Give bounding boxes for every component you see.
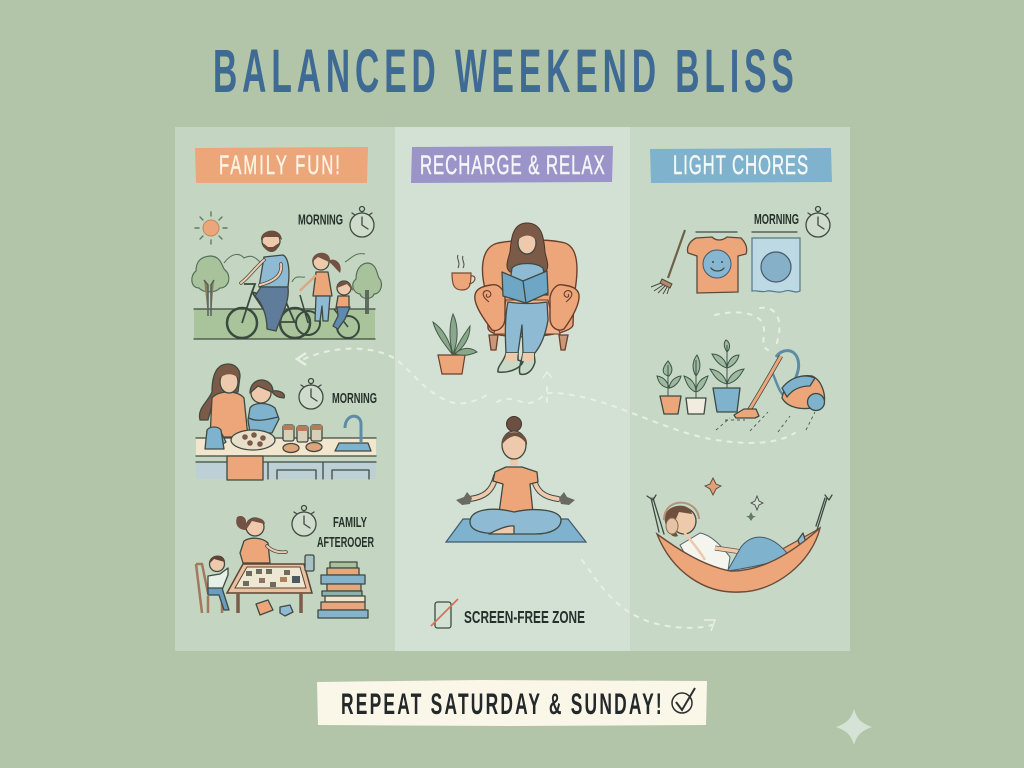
icon: stopwatch — [806, 206, 830, 237]
arrow: dashed path to family fun — [297, 349, 487, 403]
icon: broom rake — [651, 230, 685, 294]
tray of cookies — [231, 430, 275, 450]
counter — [196, 438, 376, 456]
panel: recharge and relax — [395, 127, 630, 651]
small lantern — [305, 555, 314, 571]
clothes lines — [696, 231, 797, 233]
heading: light chores: LIGHT CHORES — [673, 150, 808, 180]
bushes — [224, 254, 365, 282]
title: BALANCED WEEKEND BLISS — [213, 37, 794, 106]
figure: girl — [300, 253, 341, 321]
callout: repeat saturday and sunday: REPEAT SATURDAY & SUNDAY! — [341, 688, 662, 721]
arrow: dashed path to hammock — [582, 560, 715, 631]
label: family afternoon: FAMILY — [333, 515, 367, 531]
puzzle table — [227, 564, 312, 613]
jars — [283, 425, 322, 452]
vacuum cleaner — [716, 351, 824, 432]
scene: kitchen baking — [196, 364, 377, 480]
icon: check mark — [672, 688, 695, 713]
figure: child — [333, 281, 353, 329]
heading: family fun — [195, 147, 368, 183]
icon: crossed-out phone — [431, 599, 458, 628]
icon: stopwatch — [350, 206, 374, 237]
scene: laundry — [651, 206, 830, 294]
potted plants — [657, 340, 744, 414]
panel: family fun — [175, 127, 395, 651]
hammock back rim — [775, 528, 820, 562]
puzzle boxes on floor — [256, 600, 293, 616]
ropes — [647, 495, 832, 534]
towel — [227, 456, 263, 480]
person — [664, 503, 807, 571]
heading: recharge and relax: RECHARGE & RELAX — [420, 150, 605, 180]
label: morning: MORNING — [332, 391, 377, 407]
arrow: dashed path to light chores — [497, 308, 795, 443]
figure: woman — [236, 516, 286, 563]
heading: light chores — [650, 148, 832, 183]
callout: repeat saturday and sunday — [317, 680, 707, 726]
cabinets — [196, 462, 376, 479]
label: family afternoon — [317, 515, 374, 551]
hanging towel with circle — [752, 238, 800, 292]
icon: stopwatch — [292, 506, 316, 536]
scene: reading in armchair — [433, 223, 579, 374]
icon: potted plant — [433, 314, 477, 374]
sparkles — [705, 478, 763, 521]
scene: family bike ride — [192, 206, 381, 339]
armchair — [475, 240, 579, 350]
bicycle: girl — [296, 295, 320, 335]
icon: sparkle — [836, 709, 872, 745]
label: morning: MORNING — [298, 212, 343, 228]
scene: hammock — [647, 478, 832, 592]
label: morning: MORNING — [754, 212, 799, 228]
sink — [335, 416, 371, 451]
tree: left — [192, 256, 229, 316]
bicycle: child — [334, 309, 359, 338]
stack of books — [318, 562, 368, 618]
icon: coffee cup — [452, 255, 475, 290]
hammock body — [657, 528, 820, 592]
tree: right — [353, 263, 381, 314]
figure: yoga pose — [446, 416, 586, 542]
label: SCREEN-FREE ZONE — [464, 607, 585, 627]
kettle — [205, 427, 226, 449]
icon: sun — [195, 212, 227, 244]
body — [456, 416, 575, 534]
scene: family puzzle afternoon — [196, 506, 374, 618]
ground — [194, 309, 375, 339]
icon: stopwatch — [299, 378, 323, 409]
yoga mat — [446, 519, 586, 542]
panel: light chores — [630, 127, 850, 651]
screen-free zone note — [431, 599, 585, 628]
bicycle: dad — [227, 284, 310, 338]
heading: family fun: FAMILY FUN! — [219, 150, 340, 180]
figure: boy on chair — [196, 555, 229, 613]
t-shirt — [687, 237, 747, 293]
figure: mother — [199, 364, 248, 437]
scene: plants and vacuum — [657, 340, 824, 432]
figure: daughter — [248, 380, 284, 433]
label: family afternoon: AFTEROOER — [317, 535, 374, 551]
figure: woman reading — [498, 223, 548, 374]
figure: dad — [241, 231, 289, 331]
